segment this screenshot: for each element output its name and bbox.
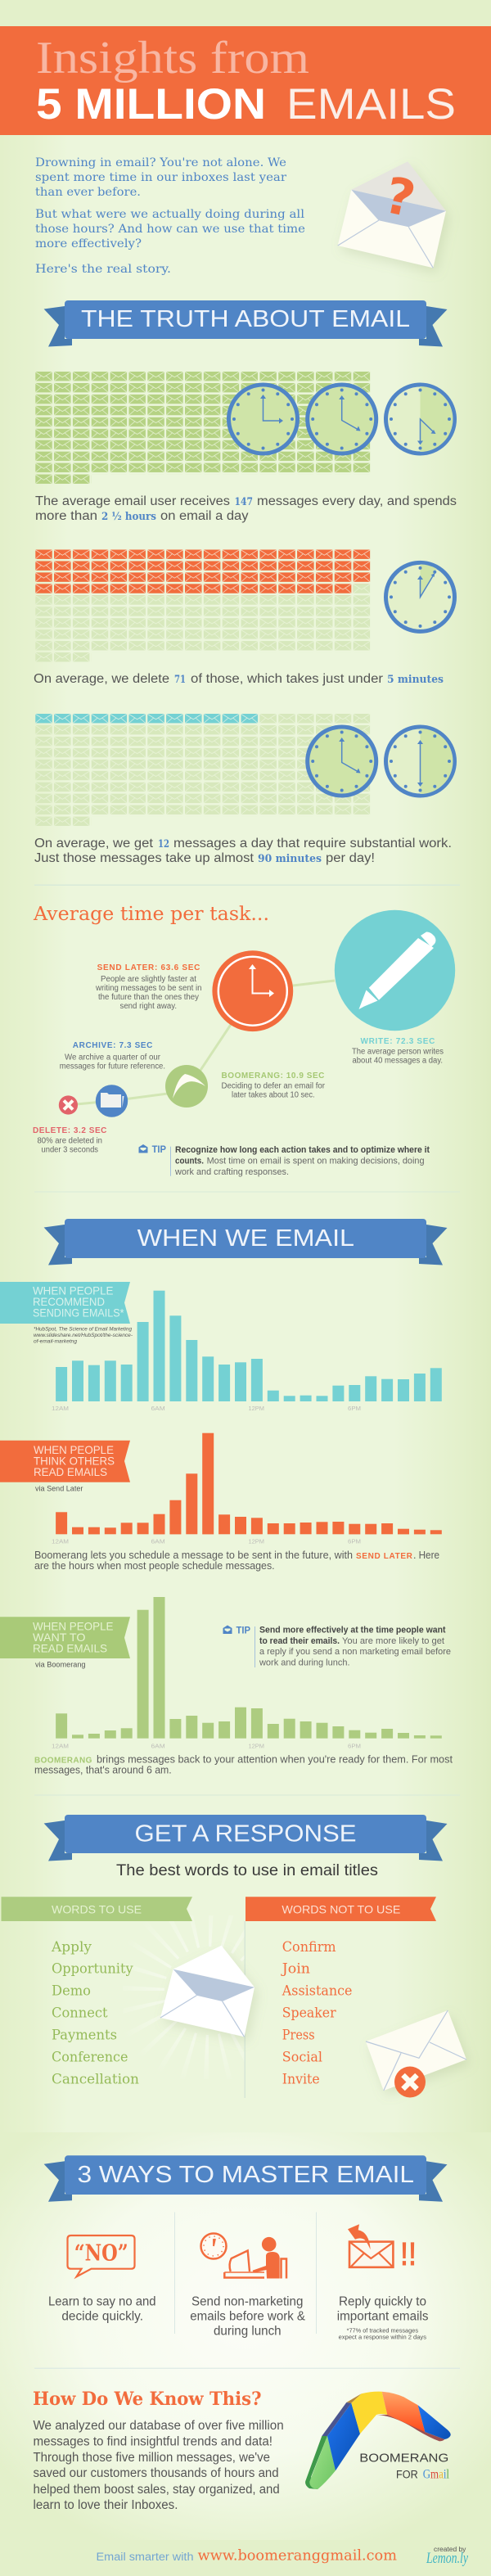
clock: one hour <box>308 727 376 796</box>
intro text: Drowning in email? You're not alone. We <box>35 156 286 169</box>
axis labels: teal chart: 6PM <box>348 1405 361 1412</box>
flag: words not to use: WORDS NOT TO USE <box>282 1902 400 1915</box>
list: words to use: Payments <box>52 2027 117 2043</box>
axis labels: green chart <box>52 1743 361 1750</box>
list: words to use: Apply <box>51 1939 92 1956</box>
content panel background <box>0 135 491 2132</box>
clock: thirty minutes <box>386 727 455 796</box>
source: via send later: via Send Later <box>35 1484 83 1493</box>
flag: when people think others read emails: READ EMAILS <box>34 1465 107 1478</box>
axis labels: teal chart <box>52 1405 361 1412</box>
flag: when people recommend sending emails: RECOMMEND <box>33 1295 105 1308</box>
footnote: hubspot source: of-email-marketng <box>34 1339 77 1345</box>
callout: boomerang <box>221 1071 326 1100</box>
list: words not to use: Invite <box>282 2071 320 2087</box>
tip: send timing: TIP <box>236 1626 250 1635</box>
caption: messages received: The average email user receives <box>35 494 230 508</box>
callout: send later: writing messages to be sent in <box>95 984 201 993</box>
ribbon: get a response: GET A RESPONSE <box>134 1820 357 1847</box>
intro text: those hours? And how can we use that time <box>35 223 305 236</box>
callout: boomerang: Deciding to defer an email for <box>221 1082 326 1091</box>
list: words not to use: Speaker <box>282 2005 336 2021</box>
icon: envelope with question mark: ? <box>380 166 420 229</box>
icon: send later clock <box>212 950 293 1031</box>
callout: write <box>352 1037 444 1066</box>
source: via boomerang: via Boomerang <box>35 1661 85 1670</box>
logo: boomerang for gmail <box>305 2392 451 2489</box>
intro text: Here's the real story. <box>35 263 171 276</box>
ribbon: 3 ways to master email <box>44 2155 447 2202</box>
icon: open white envelope <box>160 1946 255 2037</box>
tip: action time <box>139 1144 430 1177</box>
heading: average time per task: Average time per task... <box>33 904 269 925</box>
header banner <box>0 26 491 135</box>
list: words not to use: Confirm <box>282 1939 336 1956</box>
list: words to use: Demo <box>52 1983 91 1999</box>
tip: action time: counts. <box>175 1157 204 1166</box>
list: words to use: Cancellation <box>52 2071 139 2087</box>
tip text: say no: decide quickly. <box>61 2310 143 2324</box>
footer <box>0 2540 491 2576</box>
footnote: hubspot source: www.slideshare.net/HubSpot/the-science- <box>34 1333 133 1338</box>
ribbon: the truth about email <box>44 300 447 347</box>
ribbon: when we email <box>44 1219 447 1265</box>
paragraph: how do we know: learn to love their Inboxes. <box>33 2498 178 2512</box>
caption: send later: Boomerang lets you schedule a message to be sent in the future, with <box>34 1550 353 1561</box>
icon: person at desk with clock <box>201 2233 286 2279</box>
callout: delete <box>33 1126 107 1155</box>
tip text: reply quickly: important emails <box>337 2310 429 2324</box>
footnote: hubspot source: *HubSpot, The Science of Email Marketing <box>34 1327 132 1333</box>
caption: substantial work: messages a day that require substantial work. <box>173 837 452 850</box>
tip: action time: Most time on email is spent on making decisions, doing <box>207 1157 424 1166</box>
callout: delete: DELETE: 3.2 SEC <box>33 1126 107 1135</box>
caption: substantial work: 90 minutes <box>258 853 322 865</box>
envelope grid: messages received <box>35 372 372 486</box>
envelope grid: deleted messages <box>35 550 372 664</box>
intro text: spent more time in our inboxes last year <box>35 171 286 184</box>
list: words not to use <box>281 1939 352 2087</box>
icon: rejected envelope <box>366 2010 466 2097</box>
title light part: EMAILS <box>286 80 456 129</box>
axis labels: orange chart: 6AM <box>151 1538 165 1545</box>
tip: send timing: a reply if you send a non marketing email before <box>259 1647 451 1657</box>
flag: when people want to read emails: READ EMAILS <box>33 1641 107 1654</box>
list: words not to use: Assistance <box>282 1983 352 1999</box>
caption: send later: Here <box>419 1550 439 1561</box>
clock: half hour <box>386 385 455 453</box>
rays behind envelope <box>141 1922 244 2059</box>
logo: boomerang for gmail: Gmail <box>423 2467 449 2481</box>
icon: reply envelope with exclamation marks: !! <box>400 2235 417 2273</box>
footer: www.boomeranggmail.com <box>198 2547 397 2564</box>
caption: send later <box>34 1550 439 1572</box>
axis labels: green chart: 12AM <box>52 1743 69 1750</box>
callout: archive: ARCHIVE: 7.3 SEC <box>73 1041 153 1050</box>
icon: boomerang circle <box>165 1065 208 1108</box>
flag: when people recommend sending emails: SENDING EMAILS* <box>33 1306 124 1320</box>
tip: action time: Recognize how long each action takes and to optimize where it <box>175 1145 430 1155</box>
tip: send timing: to read their emails. <box>259 1636 340 1646</box>
axis labels: teal chart: 6AM <box>151 1405 165 1412</box>
footer: Lemon.ly <box>426 2550 468 2567</box>
callout: delete: 80% are deleted in <box>38 1137 102 1146</box>
caption: send later: SEND LATER <box>356 1552 413 1561</box>
tip text: reply quickly: *77% of tracked messages <box>347 2329 419 2335</box>
flag: when people want to read emails <box>0 1617 130 1658</box>
title bold part: 5 MILLION <box>36 80 266 129</box>
intro text: more effectively? <box>35 237 142 250</box>
lower section background <box>0 2132 491 2540</box>
paragraph: how do we know: saved our customers thousands of hours and <box>33 2466 279 2480</box>
icon: archive folder circle <box>96 1085 128 1117</box>
callout: send later: SEND LATER: 63.6 SEC <box>97 963 200 972</box>
icon: delete circle <box>59 1095 78 1115</box>
caption: deleted messages: 5 minutes <box>387 674 444 686</box>
caption: deleted messages: 71 <box>174 674 186 686</box>
footer: Email smarter with <box>97 2551 193 2563</box>
caption: substantial work <box>34 837 452 865</box>
caption: messages received: 2 ½ hours <box>101 511 156 523</box>
icon: tip envelope <box>139 1144 147 1153</box>
envelope grid: substantial work <box>35 714 372 828</box>
flag: when people think others read emails <box>0 1441 130 1482</box>
paragraph: how do we know: helped them boost sales, stay organized, and <box>33 2483 280 2497</box>
tip text: say no: Learn to say no and <box>48 2295 156 2308</box>
caption: deleted messages: On average, we delete <box>34 672 169 686</box>
tip: send timing: You are more likely to get <box>342 1636 444 1646</box>
list: words not to use: Join <box>281 1961 310 1978</box>
caption: boomerang: BOOMERANG <box>34 1756 92 1765</box>
list: words to use <box>51 1939 139 2087</box>
ribbon: when we email: WHEN WE EMAIL <box>137 1225 354 1252</box>
ribbon: the truth about email: THE TRUTH ABOUT EMAIL <box>81 306 410 332</box>
green bar chart: read times <box>56 1597 442 1739</box>
title line 1: Insights from <box>36 33 309 83</box>
logo: boomerang for gmail: FOR <box>396 2468 418 2480</box>
tip text: reply quickly: expect a response within 2 days <box>339 2335 427 2340</box>
tip text: reply quickly: Reply quickly to <box>339 2295 426 2308</box>
clock: hour two <box>308 385 376 453</box>
clock: hour one <box>229 385 298 453</box>
tip text: send timing <box>190 2295 306 2338</box>
teal bar chart: recommended send times <box>56 1291 442 1401</box>
axis labels: green chart: 6PM <box>348 1743 361 1750</box>
callout: write: WRITE: 72.3 SEC <box>360 1037 435 1046</box>
caption: messages received <box>35 494 457 523</box>
tip text: send timing: Send non-marketing <box>191 2295 303 2308</box>
orange bar chart: scheduled messages <box>56 1433 442 1534</box>
subheading: best words: The best words to use in email titles <box>116 1862 378 1879</box>
flag: when people think others read emails: THINK OTHERS <box>34 1454 115 1467</box>
tip: action time: TIP <box>152 1145 166 1155</box>
caption: substantial work: 12 <box>158 838 169 850</box>
caption: substantial work: Just those messages take up almost <box>34 851 255 865</box>
tip text: reply quickly <box>337 2295 429 2340</box>
ribbon: get a response <box>44 1815 447 1861</box>
caption: send later: are the hours when most people schedule messages. <box>34 1560 275 1572</box>
list: words not to use: Press <box>282 2027 315 2043</box>
caption: boomerang <box>34 1753 453 1776</box>
callout: archive <box>60 1041 165 1071</box>
flag: words to use <box>2 1897 192 1921</box>
axis labels: green chart: 6AM <box>151 1743 165 1750</box>
flag: words not to use <box>246 1897 436 1921</box>
ribbon: 3 ways to master email: 3 WAYS TO MASTER EMAIL <box>77 2162 414 2188</box>
callout: send later: send right away. <box>119 1002 177 1011</box>
callout: boomerang: later takes about 10 sec. <box>232 1091 315 1100</box>
tip: send timing <box>223 1626 451 1668</box>
icon: reply envelope with exclamation marks <box>348 2224 417 2273</box>
callout: send later <box>95 963 201 1011</box>
paragraph: how do we know: messages to find insightful trends and data! <box>33 2434 273 2448</box>
icon: envelope with question mark <box>338 161 446 268</box>
axis labels: orange chart: 6PM <box>348 1538 361 1545</box>
icon: boomerang <box>305 2392 451 2489</box>
flag: when people think others read emails: WHEN PEOPLE <box>34 1443 114 1456</box>
callout: archive: messages for future reference. <box>60 1062 165 1071</box>
callout: write: The average person writes <box>352 1048 444 1057</box>
list: words to use: Opportunity <box>52 1961 133 1978</box>
icon: no speech bubble <box>67 2235 134 2276</box>
tip text: send timing: during lunch <box>214 2325 282 2338</box>
clock: five minutes <box>386 562 455 631</box>
tip: send timing: Send more effectively at the time people want <box>259 1626 446 1635</box>
flag: when people recommend sending emails: WHEN PEOPLE <box>33 1284 113 1297</box>
paragraph: how do we know: We analyzed our database of over five million <box>33 2419 284 2433</box>
tip: action time: work and crafting responses. <box>174 1167 289 1177</box>
flag: words to use: WORDS TO USE <box>52 1902 142 1915</box>
list: words to use: Conference <box>52 2049 128 2065</box>
axis labels: green chart: 12PM <box>249 1743 264 1750</box>
tip text: send timing: emails before work & <box>190 2310 306 2324</box>
list: words not to use: Social <box>282 2049 322 2065</box>
paragraph: how do we know <box>33 2419 284 2512</box>
tip text: say no <box>48 2295 156 2324</box>
callout: archive: We archive a quarter of our <box>65 1053 161 1062</box>
axis labels: orange chart <box>52 1538 361 1545</box>
axis labels: orange chart: 12PM <box>249 1538 264 1545</box>
callout: delete: under 3 seconds <box>41 1146 98 1155</box>
callout: send later: People are slightly faster at <box>101 975 196 984</box>
flag: when people want to read emails: WANT TO <box>33 1631 86 1644</box>
caption: substantial work: per day! <box>326 851 375 865</box>
axis labels: teal chart: 12AM <box>52 1405 69 1412</box>
caption: deleted messages <box>34 672 444 686</box>
axis labels: orange chart: 12AM <box>52 1538 69 1545</box>
list: words to use: Connect <box>52 2005 108 2021</box>
icon: write circle with pencil <box>335 910 455 1031</box>
callout: boomerang: BOOMERANG: 10.9 SEC <box>221 1071 325 1080</box>
flag: when people want to read emails: WHEN PEOPLE <box>33 1619 113 1632</box>
caption: send later: . <box>413 1550 416 1561</box>
callout: write: about 40 messages a day. <box>352 1057 443 1066</box>
timeline connector <box>68 981 335 1105</box>
footer: created by <box>434 2546 466 2553</box>
caption: boomerang: brings messages back to your attention when you're ready for them. For most <box>97 1753 453 1765</box>
caption: deleted messages: of those, which takes just under <box>191 672 383 686</box>
paragraph: how do we know: Through those five million messages, we've <box>33 2451 270 2465</box>
intro text: than ever before. <box>35 186 141 199</box>
flag: when people recommend sending emails <box>0 1282 130 1324</box>
footnote: hubspot source <box>34 1327 133 1345</box>
axis labels: teal chart: 12PM <box>249 1405 264 1412</box>
caption: boomerang: messages, that's around 6 am. <box>34 1765 172 1776</box>
intro text: But what were we actually doing during all <box>35 208 305 221</box>
caption: messages received: 147 <box>234 496 253 508</box>
logo: boomerang for gmail: BOOMERANG <box>359 2451 448 2465</box>
intro text <box>35 156 305 276</box>
caption: messages received: more than <box>35 509 97 523</box>
icon: no speech bubble: “NO” <box>74 2241 128 2267</box>
heading: how do we know this: How Do We Know This? <box>33 2389 262 2410</box>
callout: send later: the future than the ones they <box>98 993 199 1002</box>
caption: messages received: messages every day, and spends <box>257 494 457 508</box>
caption: messages received: on email a day <box>160 509 249 523</box>
caption: substantial work: On average, we get <box>34 837 154 850</box>
icon: tip envelope <box>223 1626 232 1634</box>
tip: send timing: work and during lunch. <box>259 1658 350 1668</box>
